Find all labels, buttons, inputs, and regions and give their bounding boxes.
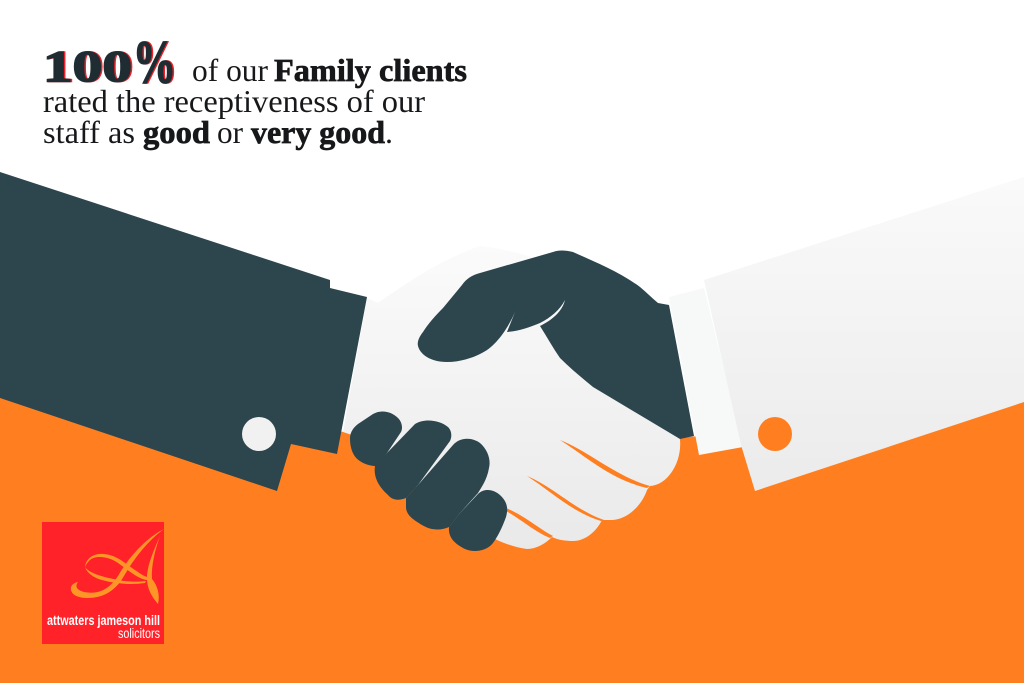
- right cufflink: [758, 417, 792, 451]
- line one: Family clients: [274, 52, 467, 88]
- finger three: [406, 439, 490, 529]
- 100 percent figure: [43, 29, 178, 95]
- line one: of our: [192, 52, 268, 88]
- dark fingers: [350, 411, 507, 551]
- finger one: [350, 411, 402, 466]
- 100 percent figure: 100: [43, 42, 132, 91]
- firm name: attwaters jameson hill: [47, 612, 160, 628]
- line three: [43, 114, 393, 150]
- logo background: [42, 522, 164, 644]
- right cuff: [669, 288, 743, 455]
- line three: or: [217, 114, 243, 150]
- dark hand with thumb: [418, 250, 694, 439]
- line three: staff as: [43, 114, 135, 150]
- 100 percent figure: %: [133, 29, 176, 95]
- 100 percent figure: %: [134, 29, 178, 95]
- right sleeve: [704, 177, 1024, 491]
- line three: good: [143, 114, 210, 150]
- orange ground: [0, 398, 1024, 683]
- white hand: [343, 246, 680, 549]
- left sleeve: [0, 172, 367, 491]
- line two: rated the receptiveness of our: [43, 83, 425, 119]
- line three: .: [385, 114, 393, 150]
- finger creases: [506, 440, 650, 538]
- script letter A: [71, 529, 164, 604]
- 100 percent figure: 100: [44, 42, 134, 91]
- line one: [192, 52, 467, 88]
- logo: [42, 522, 164, 644]
- solicitors: solicitors: [118, 625, 160, 641]
- left cufflink: [242, 417, 276, 451]
- finger four: [449, 490, 507, 551]
- statistic text: [43, 29, 467, 150]
- finger two: [375, 420, 451, 500]
- line three: very good: [251, 114, 385, 150]
